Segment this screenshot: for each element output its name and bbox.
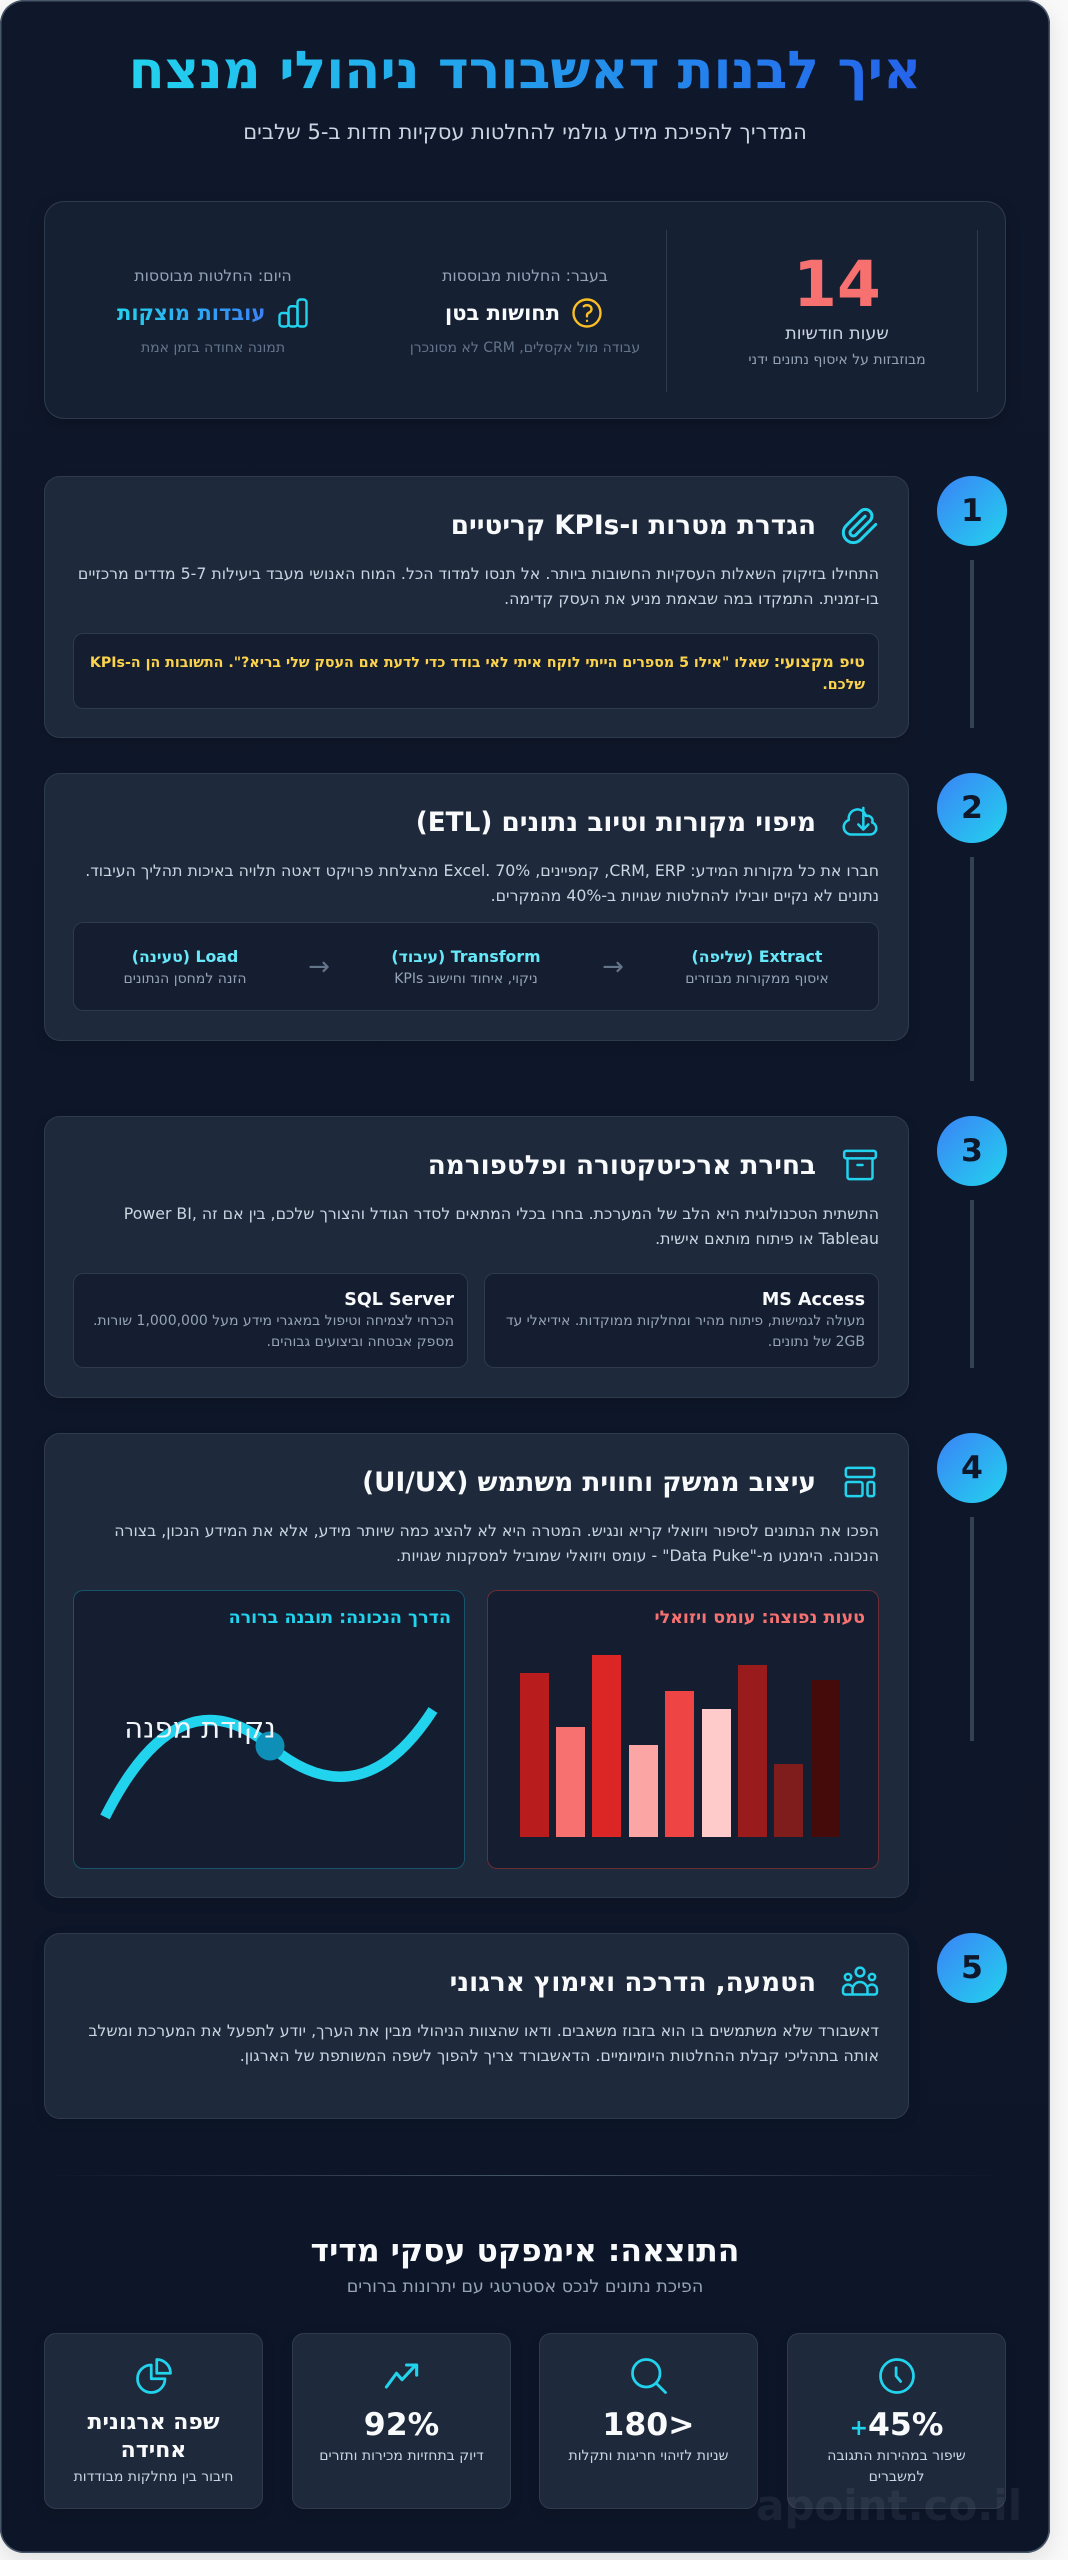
column: past decisions: עבודה מול אקסלים, CRM לא מסונכרן	[410, 340, 640, 356]
line chart with turning point: נקודת מפנה	[124, 1711, 276, 1745]
heading: עיצוב ממשק וחווית משתמש (UI/UX)	[362, 1468, 816, 1498]
step number 4	[937, 1433, 1007, 1503]
column: past decisions: תחושות בטן	[445, 301, 560, 325]
icon: team	[842, 1966, 878, 1996]
heading: מיפוי מקורות וטיוב נתונים (ETL)	[416, 808, 816, 838]
label: הדרך הנכונה: תובנה ברורה	[229, 1608, 451, 1628]
tip box	[73, 633, 879, 709]
icon: question mark	[572, 298, 602, 328]
Transform	[391, 947, 541, 987]
panel: step 1 KPIs	[44, 476, 909, 738]
icon: pie chart	[136, 2358, 172, 2394]
column: today decisions: היום: החלטות מבוססות	[134, 266, 292, 285]
Extract	[685, 947, 829, 987]
line chart with turning point	[100, 1707, 438, 1820]
stat: monthly hours: מבוזבזות על איסוף נתונים ידני	[748, 352, 926, 368]
panel: right way	[73, 1590, 465, 1869]
panel: step 5 adoption	[44, 1933, 909, 2119]
step number 3	[937, 1116, 1007, 1186]
Extract: איסוף ממקורות מבוזרים	[685, 971, 829, 987]
option: MS Access: מעולה לגמישות, פיתוח מהיר ומחלקות ממוקדות. אידיאלי עד 2GB של נתונים.	[506, 1313, 865, 1350]
step number 2	[937, 773, 1007, 843]
heading: בחירת ארכיטקטורה ופלטפורמה	[428, 1151, 816, 1181]
panel: step 2 ETL	[44, 773, 909, 1041]
panel: step 3 architecture	[44, 1116, 909, 1398]
Extract: Extract (שליפה)	[692, 947, 822, 966]
option: SQL Server	[73, 1273, 468, 1368]
column: past decisions	[410, 266, 640, 356]
column: today decisions: עובדות מוצקות	[117, 301, 265, 325]
stat: monthly hours	[748, 248, 926, 368]
stat card: forecast accuracy: 92%	[364, 2407, 439, 2443]
icon: paperclip	[842, 508, 878, 544]
body text: התחילו בזיקוק השאלות העסקיות החשובות ביותר. אל תנסו למדוד הכל. המוח האנושי מעבד ביעילות 5-7 מדדים מרכזיים בו-זמנית. התמקדו במה שבאמת מניע את העסק קדימה.	[78, 564, 879, 608]
panel: step 4 UI/UX	[44, 1433, 909, 1898]
heading: הגדרת מטרות ו-KPIs קריטיים	[451, 511, 816, 541]
stat card: detection time	[539, 2333, 758, 2509]
step number 1	[937, 476, 1007, 546]
column: today decisions	[117, 266, 308, 356]
icon: clock	[879, 2358, 915, 2394]
body text: הפכו את הנתונים לסיפור ויזואלי קריא ונגיש. המטרה היא לא להציג כמה שיותר מידע, אלא את המידע הנכון, בצורה הנכונה. הימנעו מ-"Data Puke" - עומס ויזואלי שמוביל למסקנות שגויות.	[114, 1521, 879, 1565]
stat card: shared language: חיבור בין מחלקות מבודדות	[74, 2469, 233, 2485]
title: איך לבנות דאשבורד ניהולי מנצח	[129, 40, 921, 101]
step number 1: 1	[961, 493, 983, 529]
Load: Load (טעינה)	[132, 947, 238, 966]
stat card: detection time: שניות לזיהוי חריגות ותקלות	[569, 2448, 728, 2464]
step number 3: 3	[961, 1133, 983, 1169]
step number 5	[937, 1933, 1007, 2003]
stat card: forecast accuracy	[292, 2333, 511, 2509]
arrow: →	[602, 952, 624, 982]
watermark: apoint.co.il	[756, 2481, 1022, 2530]
stat card: forecast accuracy: דיוק בתחזיות מכירות ותזרים	[319, 2448, 484, 2464]
Transform: Transform (עיבוד)	[391, 947, 541, 966]
results heading: התוצאה: אימפקט עסקי מדיד	[311, 2233, 739, 2269]
Load	[124, 947, 246, 987]
body text: דאשבורד שלא משתמשים בו הוא בזבוז משאבים. ודאו שהצוות הניהולי מבין את הערך, יודע לתפעל את המערכת ומשלב אותה בתהליכי קבלת ההחלטות היומיומיים. הדאשבורד צריך להפוך לשפה המשותפת של הארגון.	[88, 2021, 879, 2065]
icon: magnifier	[631, 2358, 667, 2394]
stat: monthly hours: שעות חודשיות	[785, 324, 889, 344]
stat card: response speed: 45%+	[850, 2407, 943, 2443]
body text: חברו את כל מקורות המידע: CRM, ERP, קמפיינים, Excel. 70% מהצלחת פרויקט דאטה תלויה באיכות תהליך העיבוד. נתונים לא נקיים יובילו להחלטות שגויות ב-40% מהמקרים.	[85, 861, 879, 905]
step number 2: 2	[961, 790, 983, 826]
stat card: shared language: שפה ארגונית אחידה	[87, 2410, 220, 2463]
ETL flow	[73, 922, 879, 1011]
option: MS Access	[484, 1273, 879, 1368]
option: SQL Server: הכרחי לצמיחה וטיפול במאגרי מידע מעל 1,000,000 שורות. מספק אבטחה וביצועים גבוהים.	[93, 1313, 454, 1350]
body text: התשתית הטכנולוגית היא הלב של המערכת. בחרו בכלי המתאים לסדר הגודל והצורך שלכם, בין אם זה Power BI, Tableau או פיתוח מותאם אישית.	[124, 1204, 879, 1248]
icon: cloud download	[842, 806, 878, 836]
icon: layout	[844, 1466, 876, 1498]
arrow: →	[308, 952, 330, 982]
Transform: ניקוי, איחוד וחישוב KPIs	[394, 971, 538, 987]
option: MS Access: MS Access	[762, 1290, 865, 1310]
label: טעות נפוצה: עומס ויזואלי	[654, 1608, 865, 1628]
stat: monthly hours: 14	[793, 248, 881, 321]
step number 5: 5	[961, 1950, 983, 1986]
option: SQL Server: SQL Server	[344, 1290, 454, 1310]
icon: archive box	[842, 1150, 878, 1180]
Load: הזנה למחסן הנתונים	[124, 971, 246, 987]
bar chart	[520, 1655, 840, 1837]
step number 4: 4	[961, 1450, 983, 1486]
panel: past vs today summary	[44, 201, 1006, 419]
stat card: detection time: <180	[602, 2407, 695, 2443]
stat card: response speed	[787, 2333, 1006, 2509]
stat card: shared language	[44, 2333, 263, 2509]
tip box: טיפ מקצועי: שאלו "אילו 5 מספרים הייתי לוקח איתי לאי בודד כדי לדעת אם העסק שלי בריא?". התשובות הן ה-KPIs שלכם.	[90, 652, 865, 693]
column: today decisions: תמונה אחודה בזמן אמת	[141, 340, 285, 356]
heading: הטמעה, הדרכה ואימוץ ארגוני	[450, 1968, 816, 1998]
panel: common mistake	[487, 1590, 879, 1869]
icon: bar chart	[278, 298, 308, 328]
subtitle: המדריך להפיכת מידע גולמי להחלטות עסקיות חדות ב-5 שלבים	[243, 120, 807, 144]
icon: trend arrow	[384, 2363, 418, 2389]
stat card: response speed: שיפור במהירות התגובה למשברים	[827, 2448, 966, 2485]
column: past decisions: בעבר: החלטות מבוססות	[442, 266, 608, 285]
results subheading: הפיכת נתונים לנכס אסטרטגי עם יתרונות ברורים	[347, 2277, 703, 2297]
